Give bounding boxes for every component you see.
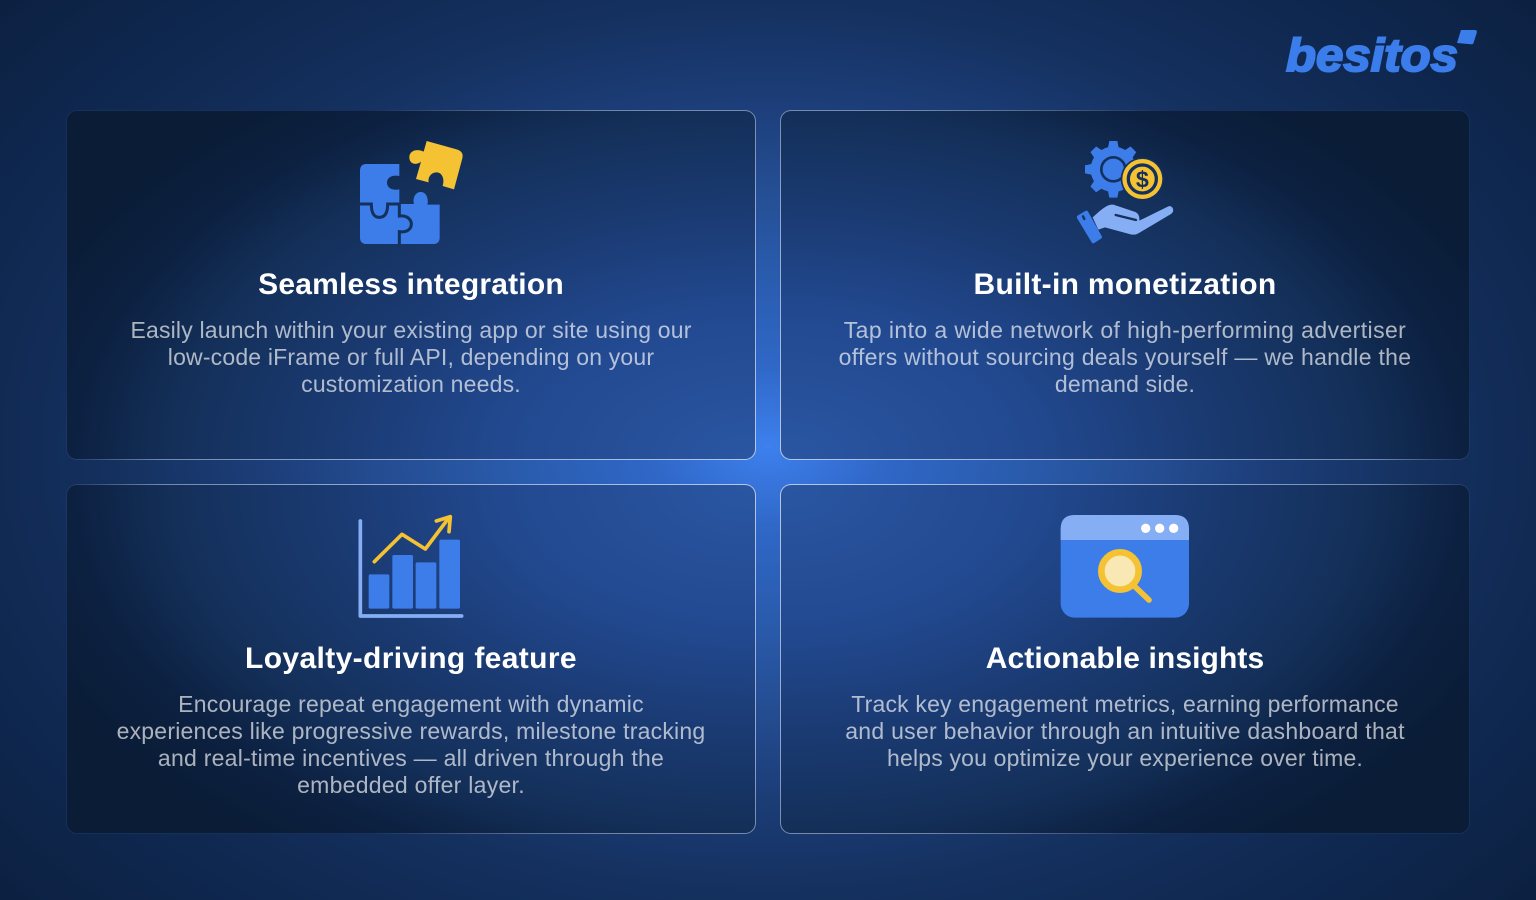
icon: puzzle pieces xyxy=(360,141,463,244)
text: seamless integration description: customization needs. xyxy=(301,371,521,397)
text: actionable insights description: and user behavior through an intuitive dashboard that xyxy=(845,718,1405,744)
text: loyalty-driving description xyxy=(117,691,705,798)
icon: browser window with magnifier xyxy=(1060,515,1189,618)
text: actionable insights description: helps you optimize your experience over time. xyxy=(887,745,1363,771)
panel: loyalty-driving feature xyxy=(66,484,756,834)
text: loyalty-driving description: Encourage repeat engagement with dynamic xyxy=(178,691,644,717)
panel: actionable insights xyxy=(780,484,1470,834)
text: seamless integration description: Easily launch within your existing app or site using our xyxy=(130,317,692,343)
heading: built-in monetization: Built-in monetization xyxy=(974,268,1276,301)
text: loyalty-driving description: experiences like progressive rewards, milestone tracking xyxy=(117,718,705,744)
icon: bar chart with arrow xyxy=(358,514,464,618)
icon: gear, coin and hand xyxy=(1076,141,1174,244)
text: actionable insights description: Track key engagement metrics, earning performance xyxy=(851,691,1399,717)
text: built-in monetization description: offers without sourcing deals yourself — we handle the xyxy=(839,344,1411,370)
text: built-in monetization description: demand side. xyxy=(1055,371,1195,397)
text: built-in monetization description: Tap into a wide network of high-performing advertiser xyxy=(844,317,1406,343)
panel: seamless integration xyxy=(66,110,756,460)
text: seamless integration description: low-code iFrame or full API, depending on your xyxy=(168,344,654,370)
text: seamless integration description xyxy=(130,317,692,397)
heading: seamless integration: Seamless integration xyxy=(258,268,564,301)
heading: actionable insights: Actionable insights xyxy=(986,642,1264,675)
text: built-in monetization description xyxy=(839,317,1411,397)
heading: loyalty-driving feature: Loyalty-driving feature xyxy=(245,642,577,675)
panel: built-in monetization xyxy=(780,110,1470,460)
logo: besitos: besitos xyxy=(1286,29,1458,81)
text: loyalty-driving description: embedded offer layer. xyxy=(297,772,525,798)
text: actionable insights description xyxy=(845,691,1405,771)
text: loyalty-driving description: and real-time incentives — all driven through the xyxy=(158,745,664,771)
icon: gear, coin and hand: $ xyxy=(1136,166,1149,192)
